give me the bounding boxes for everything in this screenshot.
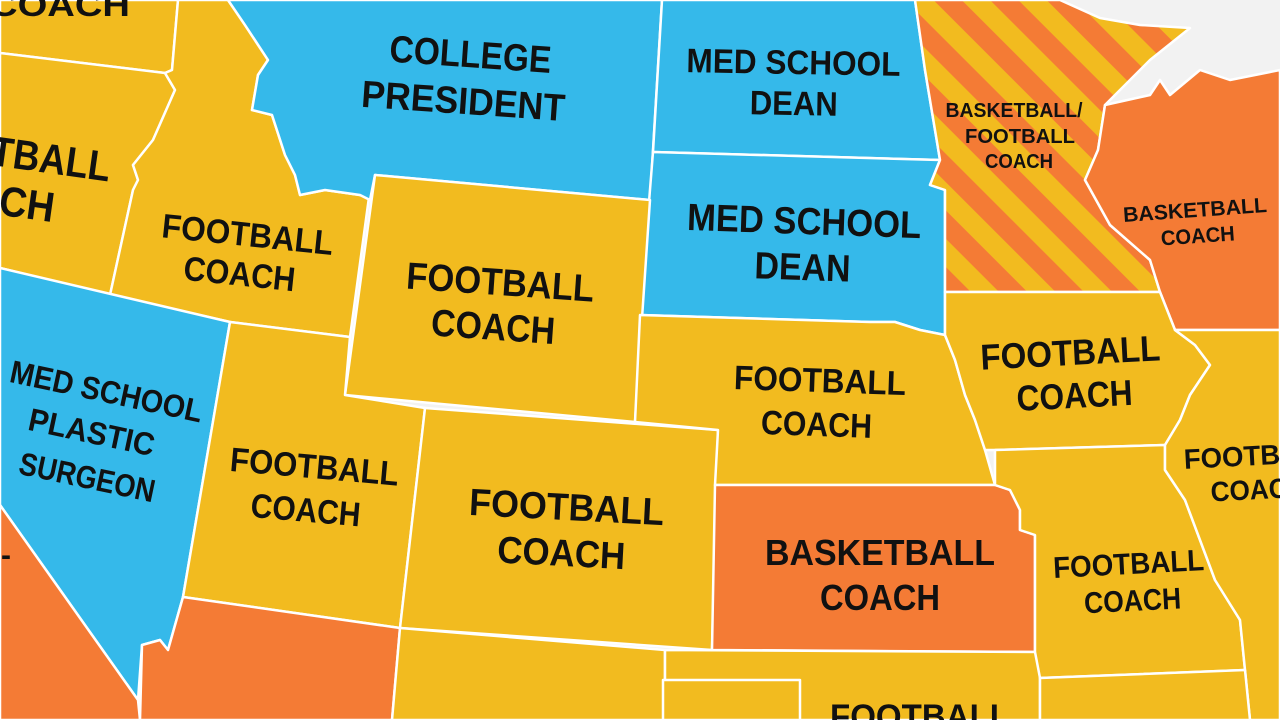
label: south dakota: MED SCHOOL bbox=[686, 197, 922, 247]
state: texas panhandle bbox=[663, 680, 800, 720]
state: oklahoma bbox=[665, 650, 1040, 720]
label: idaho: FOOTBALL bbox=[160, 207, 335, 263]
label: colorado: COACH bbox=[496, 530, 626, 578]
label: wyoming: COACH bbox=[430, 302, 556, 353]
state: california bbox=[0, 505, 140, 720]
label: minnesota: COACH bbox=[985, 151, 1053, 173]
state: south dakota bbox=[640, 152, 945, 335]
label: iowa bbox=[979, 327, 1163, 421]
state: utah bbox=[183, 322, 425, 628]
state: wyoming bbox=[345, 175, 650, 422]
label: missouri: FOOTBALL bbox=[1052, 544, 1205, 585]
label: iowa: COACH bbox=[1016, 372, 1134, 419]
state: kansas bbox=[712, 485, 1035, 652]
label: wisconsin: COACH bbox=[1160, 222, 1236, 250]
label: nebraska: FOOTBALL bbox=[733, 359, 907, 403]
state: nevada bbox=[0, 268, 230, 700]
label: nevada: SURGEON bbox=[16, 445, 158, 509]
state: washington bbox=[0, 0, 178, 73]
label: iowa: FOOTBALL bbox=[979, 327, 1161, 378]
state: illinois bbox=[1165, 330, 1280, 720]
label: montana: COLLEGE bbox=[388, 29, 553, 82]
label: kansas: COACH bbox=[820, 577, 940, 618]
label: wisconsin: BASKETBALL bbox=[1122, 194, 1268, 227]
label: north dakota bbox=[685, 42, 901, 125]
label: north dakota: MED SCHOOL bbox=[686, 42, 901, 84]
label: north dakota: DEAN bbox=[749, 84, 838, 124]
state: wisconsin bbox=[1085, 70, 1280, 330]
label: montana bbox=[360, 27, 570, 130]
state: idaho bbox=[110, 0, 372, 337]
label: montana: PRESIDENT bbox=[360, 74, 566, 130]
label: minnesota bbox=[946, 100, 1083, 173]
label: illinois bbox=[1183, 436, 1280, 509]
label: nebraska: COACH bbox=[760, 404, 873, 446]
label: south dakota: DEAN bbox=[754, 245, 851, 291]
label: oregon bbox=[0, 116, 114, 238]
label: nebraska bbox=[732, 359, 907, 447]
label: california: - bbox=[1, 539, 11, 572]
state: new mexico bbox=[392, 628, 665, 720]
label: idaho: COACH bbox=[182, 250, 297, 299]
label: missouri bbox=[1052, 544, 1207, 622]
state: arizona bbox=[140, 597, 400, 720]
label: minnesota: FOOTBALL bbox=[965, 126, 1075, 148]
state: arkansas bbox=[1040, 670, 1250, 720]
state: montana bbox=[228, 0, 662, 200]
state: iowa bbox=[945, 292, 1210, 450]
state: minnesota bbox=[915, 0, 1190, 292]
label: missouri: COACH bbox=[1083, 582, 1182, 620]
state: colorado bbox=[400, 408, 718, 650]
state: nebraska bbox=[635, 315, 995, 485]
label: kansas: BASKETBALL bbox=[765, 532, 995, 573]
label: nevada: MED SCHOOL bbox=[7, 353, 206, 429]
label: minnesota: BASKETBALL/ bbox=[946, 100, 1083, 122]
label: colorado bbox=[466, 482, 665, 580]
state: missouri bbox=[995, 445, 1245, 678]
label: south dakota bbox=[685, 197, 922, 293]
state: north dakota bbox=[653, 0, 940, 160]
label: wyoming: FOOTBALL bbox=[405, 256, 595, 311]
label: kansas bbox=[765, 532, 995, 618]
label: wisconsin bbox=[1122, 194, 1270, 253]
label: colorado: FOOTBALL bbox=[468, 482, 665, 534]
label: utah: FOOTBALL bbox=[229, 441, 400, 494]
label: wyoming bbox=[402, 256, 595, 356]
state: oregon bbox=[0, 53, 175, 295]
label: nevada bbox=[0, 353, 206, 515]
label: utah: COACH bbox=[249, 487, 362, 534]
label: utah bbox=[225, 441, 400, 537]
label: idaho bbox=[156, 207, 335, 303]
label: nevada: PLASTIC bbox=[25, 401, 158, 463]
